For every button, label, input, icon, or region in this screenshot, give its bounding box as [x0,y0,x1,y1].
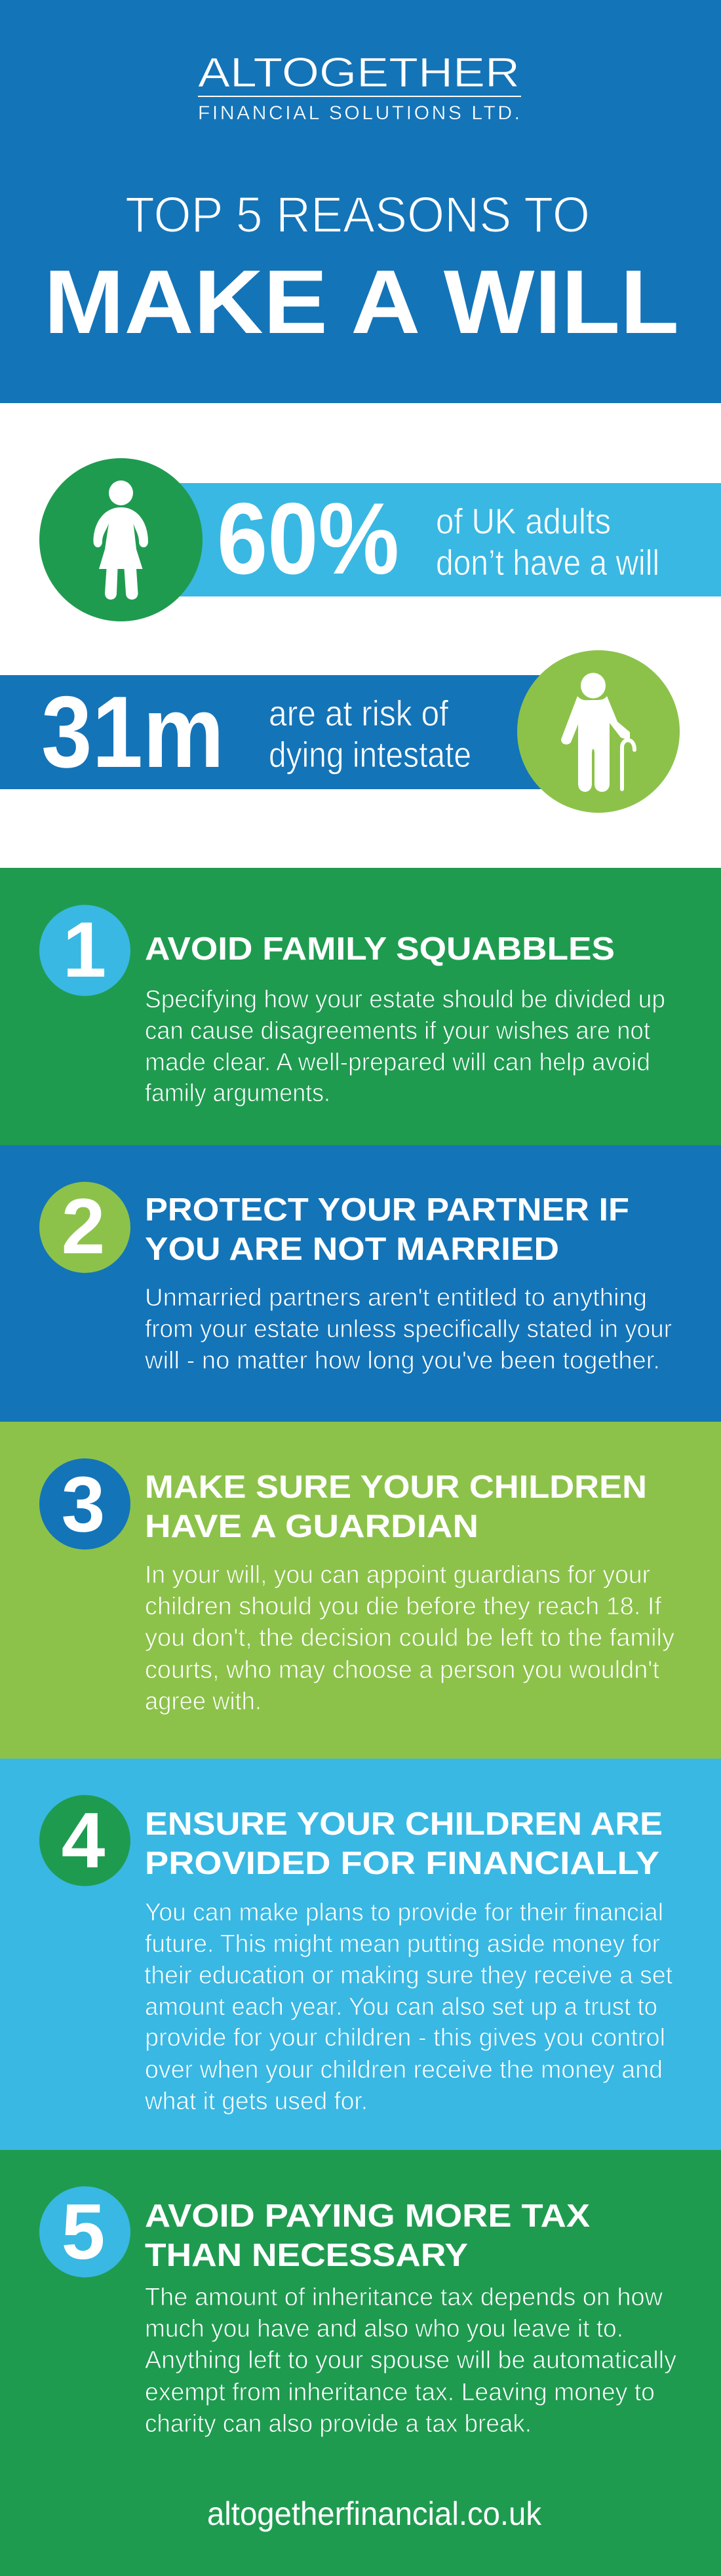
heading: avoid paying more tax: THAN NECESSARY [145,2238,468,2273]
body text: future. This might mean putting aside money for [145,1930,660,1958]
text: of UK adults: don’t have a will [436,542,659,583]
panel: reason 2 [0,1145,721,1422]
heading: avoid paying more tax [145,2198,590,2273]
title: top 5 reasons: TOP 5 REASONS TO [125,187,590,243]
number badge 3 [39,1458,130,1550]
body text: exempt from inheritance tax. Leaving money to [145,2379,655,2406]
text: of UK adults: of UK adults [436,501,611,541]
number badge 3: 3 [62,1460,105,1548]
heading: protect your partner [145,1192,629,1267]
stat: 60%: 60% [217,482,399,595]
body text: what it gets used for. [144,2088,368,2115]
panel: 60 percent statistic [39,458,721,621]
heading: protect your partner: PROTECT YOUR PARTNER IF [145,1192,629,1228]
body text: their education or making sure they receive a set [144,1962,672,1989]
heading: make sure your children: MAKE SURE YOUR CHILDREN [145,1470,647,1505]
body text [145,2284,676,2438]
body text: agree with. [145,1688,262,1715]
body text: will - no matter how long you've been together. [144,1347,660,1375]
number badge 1 [39,905,130,996]
body text: from your estate unless specifically stated in your [145,1316,672,1343]
number badge 1: 1 [63,906,106,994]
website url: altogetherfinancial.co.uk [207,2495,542,2532]
body text [145,986,665,1107]
body text [145,1561,674,1715]
body text: courts, who may choose a person you wouldn't [145,1656,659,1684]
number badge 4 [39,1795,130,1886]
body text: Specifying how your estate should be divided up [145,986,665,1013]
body text: can cause disagreements if your wishes are not [145,1017,650,1045]
number badge 2 [39,1182,130,1273]
body text: family arguments. [145,1080,330,1107]
body text: made clear. A well-prepared will can help avoid [145,1049,650,1076]
body text: You can make plans to provide for their financial [145,1899,663,1926]
logo: ALTOGETHER [198,50,520,96]
panel: header [0,0,721,403]
body text: amount each year. You can also set up a trust to [145,1993,657,2021]
panel: reason 4 [0,1759,721,2150]
number badge 4: 4 [62,1797,106,1884]
text: at risk of dying intestate: are at risk of [269,693,449,733]
panel: 31m statistic [0,650,680,813]
number badge 2: 2 [62,1182,105,1270]
icon: woman in circle [39,458,203,621]
heading: make sure your children [145,1470,647,1544]
text: at risk of dying intestate: dying intestate [269,734,471,775]
number badge 5: 5 [62,2188,105,2276]
heading: make sure your children: HAVE A GUARDIAN [145,1509,478,1544]
heading: avoid family squabbles: AVOID FAMILY SQUABBLES [145,931,615,967]
body text: Unmarried partners aren't entitled to anything [145,1284,647,1312]
body text [144,1284,672,1375]
stat: 31m: 31m [41,675,224,789]
body text: over when your children receive the money and [145,2056,663,2084]
heading: avoid paying more tax: AVOID PAYING MORE TAX [145,2198,590,2234]
body text: children should you die before they reach 18. If [145,1593,661,1620]
heading: ensure your children: ENSURE YOUR CHILDREN ARE [145,1806,663,1842]
panel: reason 1 [0,868,721,1145]
text: at risk of dying intestate [269,693,471,775]
panel: reason 5 [0,2150,721,2576]
body text: charity can also provide a tax break. [145,2410,532,2438]
panel: reason 3 [0,1422,721,1759]
body text: Anything left to your spouse will be automatically [145,2347,676,2374]
icon: elderly person in circle [517,650,680,813]
heading: ensure your children [145,1806,663,1881]
text: of UK adults [436,501,659,583]
body text: In your will, you can appoint guardians for your [145,1561,650,1589]
number badge 5 [39,2187,130,2277]
heading: protect your partner: YOU ARE NOT MARRIED [145,1232,559,1267]
body text: you don't, the decision could be left to the family [145,1624,674,1652]
title: make a will: MAKE A WILL [44,252,679,353]
body text: provide for your children - this gives you control [145,2024,665,2052]
heading: ensure your children: PROVIDED FOR FINANCIALLY [145,1846,659,1881]
body text [144,1899,672,2115]
body text: The amount of inheritance tax depends on how [145,2284,663,2311]
logo [198,50,521,124]
body text: much you have and also who you leave it to. [145,2315,623,2343]
logo: FINANCIAL SOLUTIONS LTD. [198,102,520,124]
